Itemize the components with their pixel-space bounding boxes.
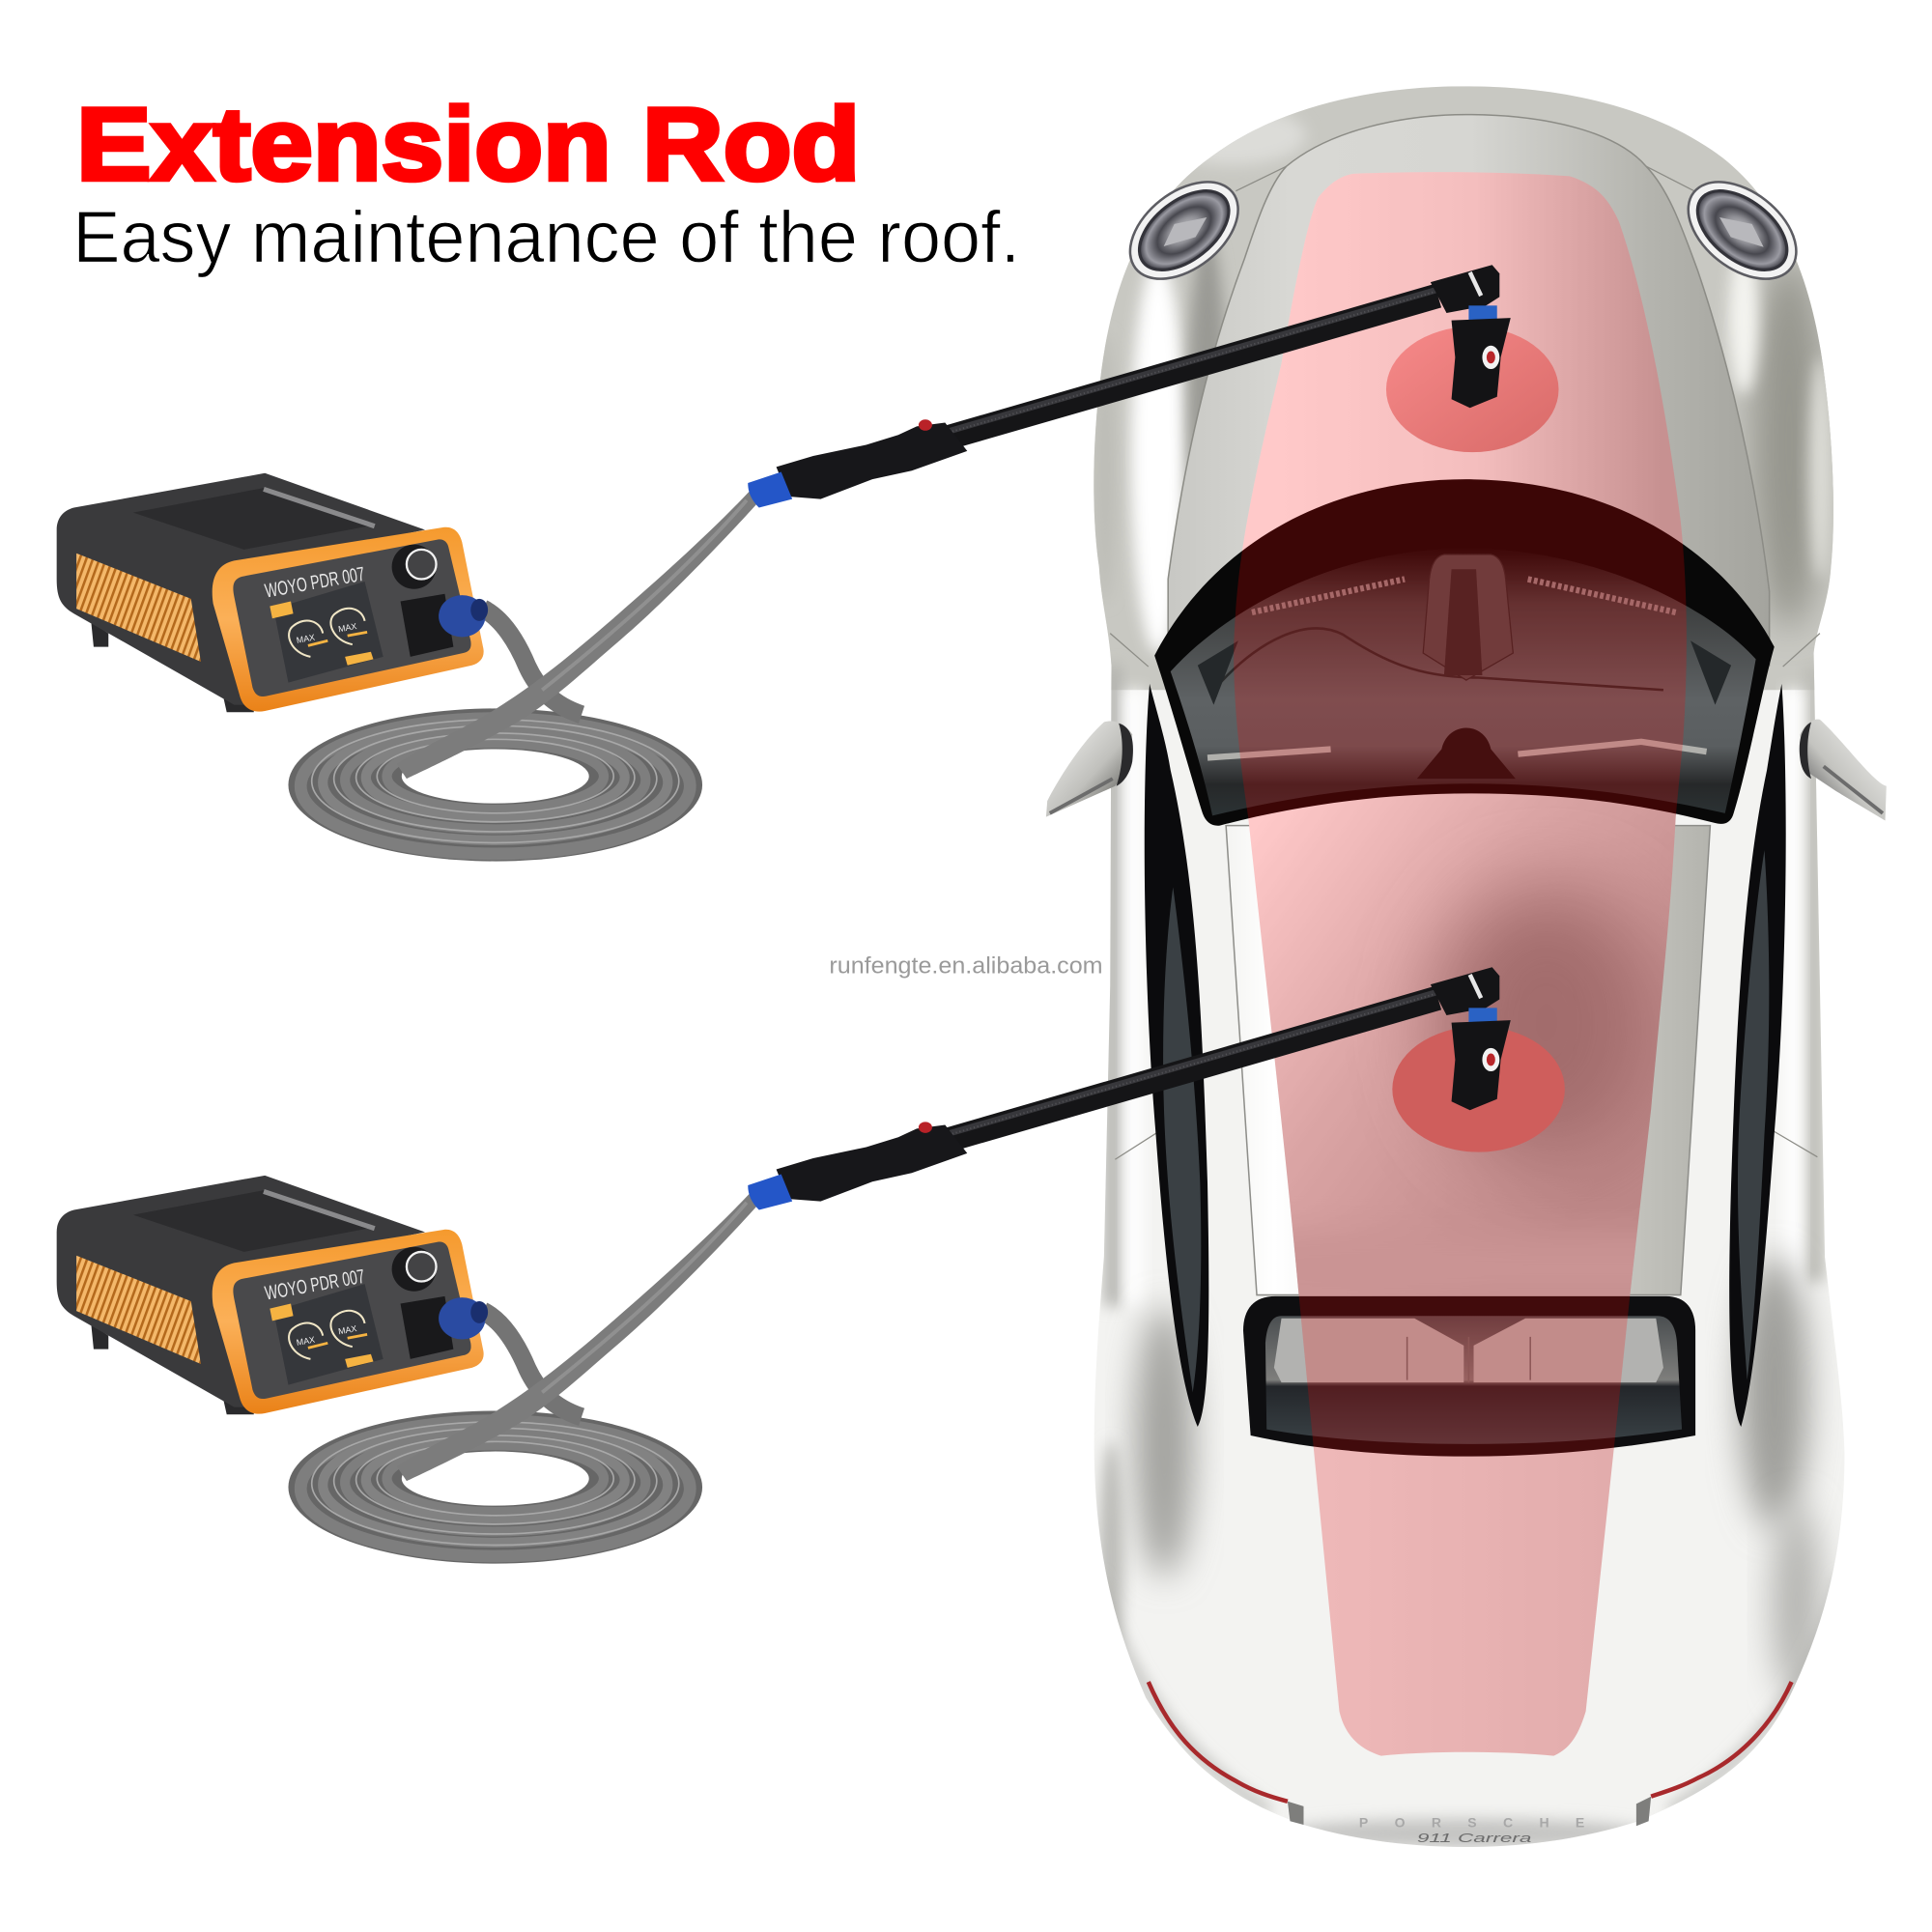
gauge readings: MAX bbox=[337, 1323, 357, 1336]
rod blue collar bbox=[748, 472, 792, 508]
right window glass bbox=[1738, 850, 1769, 1380]
car bbox=[1046, 86, 1887, 1848]
cable to rod bbox=[397, 492, 759, 779]
gauge readings: MAX bbox=[337, 621, 357, 634]
gauges bbox=[289, 1311, 365, 1359]
box feet bbox=[91, 1324, 254, 1414]
title: Extension Rod bbox=[76, 86, 860, 202]
rod elbow bbox=[1431, 265, 1499, 313]
red button bbox=[919, 1122, 932, 1133]
side vent bbox=[76, 554, 201, 662]
car body bbox=[1094, 86, 1844, 1847]
door strips bbox=[1104, 666, 1122, 1306]
rear window bbox=[1243, 1296, 1695, 1457]
highlight circle: upper bbox=[1386, 327, 1559, 452]
head blue collar bbox=[1468, 305, 1497, 321]
stripe base tones bbox=[1220, 160, 1725, 1775]
blue connector bbox=[439, 1297, 486, 1339]
gauge bars bbox=[308, 632, 367, 645]
screen bbox=[273, 582, 384, 683]
front panel bbox=[233, 539, 471, 696]
box top tray bbox=[133, 1190, 375, 1252]
socket bbox=[401, 1296, 453, 1359]
right mirror bbox=[1800, 720, 1887, 820]
front frame bbox=[213, 527, 484, 712]
head blue collar bbox=[1468, 1008, 1497, 1023]
cable to box bbox=[483, 1311, 582, 1417]
gauge readings bbox=[296, 1323, 357, 1348]
rear badge: PORSCHE bbox=[1359, 1815, 1584, 1831]
red button bbox=[919, 419, 932, 431]
tail lights bbox=[1149, 1682, 1288, 1802]
logo tag bbox=[270, 601, 294, 618]
front panel bbox=[233, 1241, 471, 1399]
rear model badge: 911 Carrera bbox=[1417, 1831, 1531, 1845]
right headlight bbox=[1670, 162, 1814, 298]
magnetic head bbox=[1452, 318, 1511, 408]
coiled cable bbox=[288, 708, 702, 862]
dashboard details bbox=[1213, 629, 1663, 690]
machine with rod: upper bbox=[57, 265, 1511, 862]
body shading bbox=[1084, 86, 1848, 1848]
handle bbox=[777, 423, 967, 499]
machine with rod: lower bbox=[57, 967, 1511, 1564]
magnetic head bbox=[1452, 1020, 1511, 1110]
handle bbox=[777, 1125, 967, 1202]
device label: WOYO PDR 007 bbox=[264, 564, 366, 603]
rod elbow bbox=[1431, 967, 1499, 1015]
hood panel bbox=[1168, 115, 1770, 666]
box side bbox=[57, 1176, 425, 1407]
hood corner lines bbox=[1110, 166, 1820, 1159]
windshield bbox=[1154, 479, 1775, 826]
gauge readings: MAX bbox=[296, 1335, 316, 1348]
bumper vents bbox=[1288, 1797, 1651, 1826]
standby button bbox=[345, 652, 373, 666]
standby button bbox=[345, 1354, 373, 1368]
gauges bbox=[289, 609, 365, 657]
left window glass bbox=[1163, 887, 1201, 1392]
roof panel bbox=[1226, 826, 1710, 1295]
device label: WOYO PDR 007 bbox=[264, 1266, 366, 1305]
cable to box bbox=[483, 609, 582, 715]
screen bbox=[273, 1284, 384, 1385]
gauge readings: MAX bbox=[296, 633, 316, 645]
front frame bbox=[213, 1230, 484, 1414]
watermark: runfengte.en.alibaba.com bbox=[829, 953, 1103, 980]
box feet bbox=[91, 622, 254, 712]
logo tag bbox=[270, 1303, 294, 1321]
gauge bars bbox=[308, 1334, 367, 1348]
cable to rod bbox=[397, 1194, 759, 1481]
rear tones bbox=[1135, 1306, 1194, 1577]
side vent bbox=[76, 1256, 201, 1364]
blue connector bbox=[439, 595, 486, 637]
rod blue collar bbox=[748, 1175, 792, 1210]
knob bbox=[392, 545, 437, 589]
red coverage stripe bbox=[1234, 172, 1687, 1756]
box side bbox=[57, 473, 425, 705]
left side window bbox=[1145, 684, 1208, 1427]
extension rod bbox=[949, 290, 1438, 438]
coiled cable bbox=[288, 1410, 702, 1564]
right side window bbox=[1729, 684, 1786, 1427]
box top tray bbox=[133, 488, 375, 550]
left mirror bbox=[1046, 722, 1133, 817]
left headlight bbox=[1112, 162, 1256, 298]
gauge readings bbox=[296, 621, 357, 645]
knob bbox=[392, 1247, 437, 1292]
socket bbox=[401, 594, 453, 657]
highlight circle: lower bbox=[1392, 1026, 1565, 1152]
fender tones bbox=[1084, 86, 1848, 690]
extension rod bbox=[949, 992, 1438, 1140]
subtitle: Easy maintenance of the roof. bbox=[72, 197, 1020, 279]
